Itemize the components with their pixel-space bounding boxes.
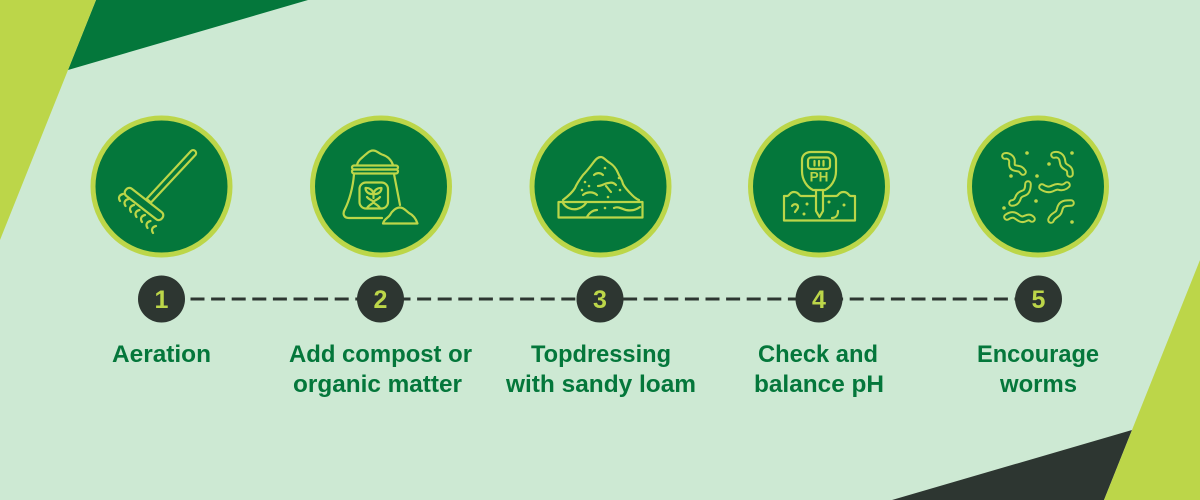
icon: pH meter in soil xyxy=(750,118,888,255)
step 1: aeration xyxy=(93,118,230,368)
step 5: worms xyxy=(970,118,1106,398)
number badge 3 xyxy=(576,276,624,322)
label: check and balance pH xyxy=(754,341,884,398)
step 4: check pH xyxy=(750,118,888,398)
corner shape: dark green top left xyxy=(68,0,308,70)
icon: sandy soil pile xyxy=(532,118,669,255)
label: check and balance pH: Check and xyxy=(758,341,878,368)
corner shape: charcoal bottom right xyxy=(892,430,1132,500)
icon: compost bag xyxy=(312,118,450,255)
number badge 2 xyxy=(357,276,404,322)
number badge 4 xyxy=(796,276,842,322)
number badge 5 xyxy=(1015,276,1062,322)
label: add compost or organic matter: organic matter xyxy=(293,371,462,398)
number badge 2: 2 xyxy=(374,286,387,314)
label: add compost or organic matter xyxy=(289,341,472,398)
label: encourage worms: Encourage xyxy=(977,341,1099,368)
number badge 3: 3 xyxy=(593,286,607,314)
step 3: topdressing xyxy=(505,118,696,398)
icon: worms xyxy=(970,118,1106,255)
number badge 1: 1 xyxy=(155,286,169,314)
number badge 1 xyxy=(138,276,185,322)
label: check and balance pH: balance pH xyxy=(754,371,884,398)
number badge 5: 5 xyxy=(1032,286,1046,314)
icon: rake xyxy=(93,118,230,255)
label: topdressing with sandy loam xyxy=(505,341,696,398)
corner shape: lime top left xyxy=(0,0,96,240)
number badge 4: 4 xyxy=(812,286,826,314)
label: aeration: Aeration xyxy=(112,341,211,368)
icon: pH meter in soil: PH xyxy=(810,170,828,184)
label: topdressing with sandy loam: Topdressing xyxy=(531,341,671,368)
dashed connector line xyxy=(190,298,1016,300)
label: encourage worms: worms xyxy=(999,371,1077,398)
label: add compost or organic matter: Add compost or xyxy=(289,341,472,368)
step 2: compost xyxy=(289,118,472,398)
label: topdressing with sandy loam: with sandy loam xyxy=(505,371,696,398)
corner shape: lime bottom right xyxy=(1104,260,1200,500)
label: encourage worms xyxy=(977,341,1099,398)
